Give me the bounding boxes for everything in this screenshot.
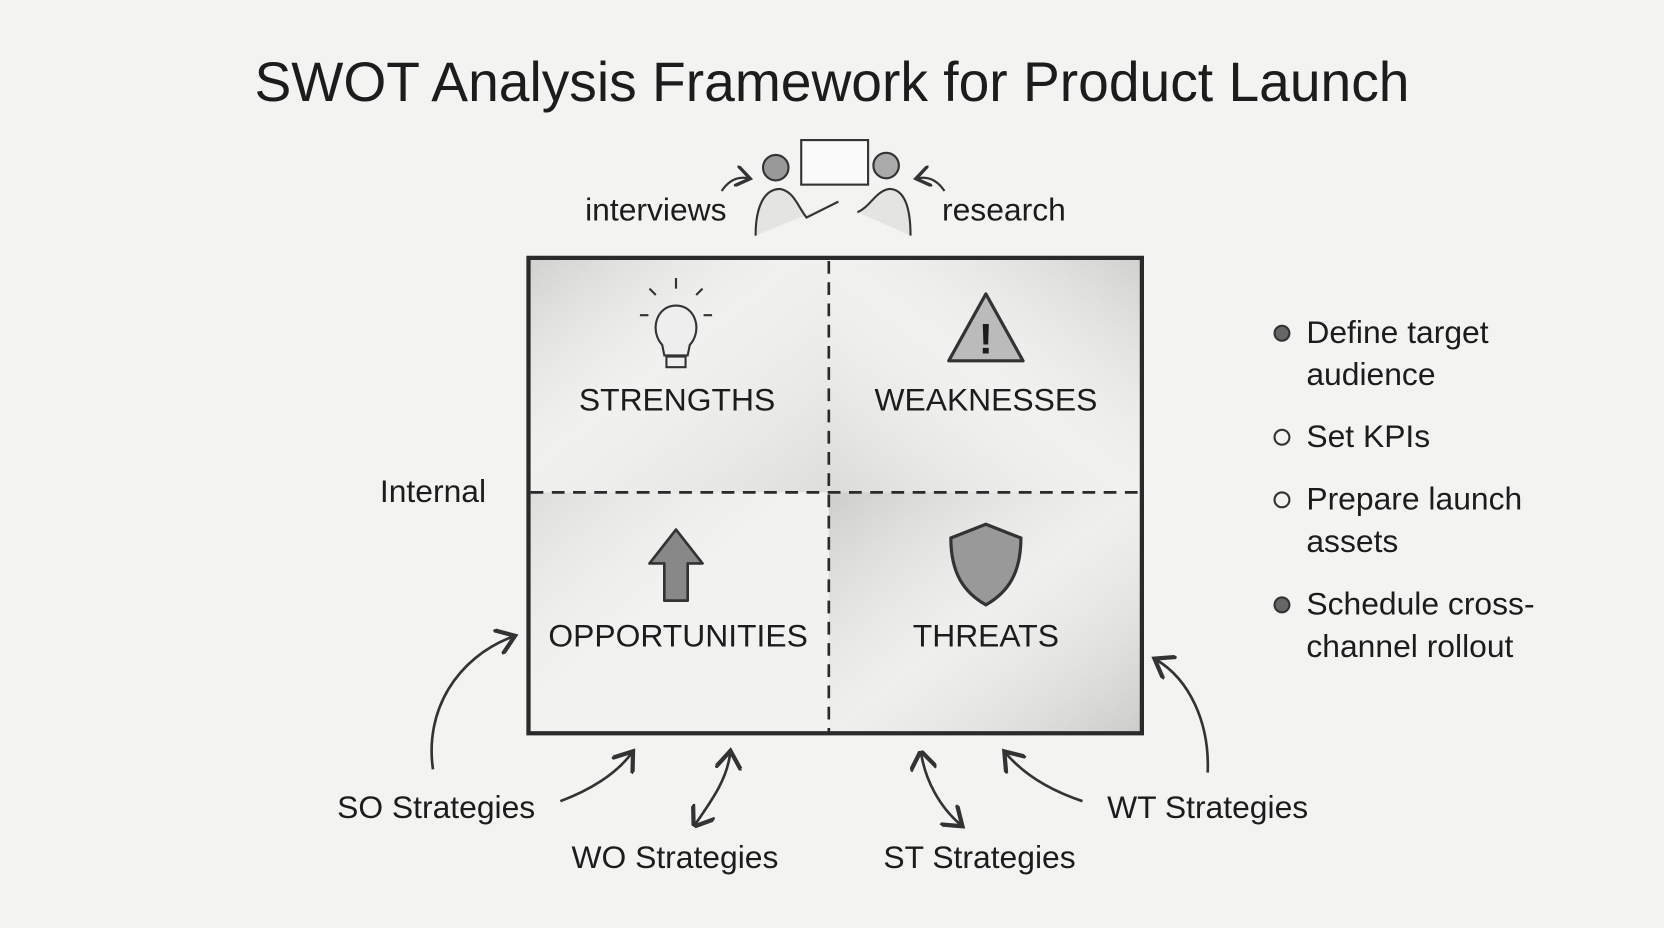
- checklist: Set KPIs: [1306, 418, 1430, 454]
- quadrant: opportunities: OPPORTUNITIES: [548, 617, 808, 653]
- strategy labels: [337, 789, 1308, 875]
- quadrant: strengths: [579, 278, 775, 418]
- people icon: [756, 140, 911, 236]
- label: research: [918, 178, 1066, 228]
- strategy labels: WO Strategies: [571, 839, 778, 875]
- checklist: Prepare launch: [1306, 480, 1522, 516]
- label: interviews: interviews: [585, 192, 727, 228]
- strategy labels: ST Strategies: [883, 839, 1076, 875]
- icon: lightbulb: [640, 278, 712, 367]
- label: internal: Internal: [380, 473, 486, 509]
- checklist: Define target: [1306, 314, 1489, 350]
- quadrant: weaknesses: WEAKNESSES: [874, 382, 1097, 418]
- icon: shield: [951, 524, 1021, 605]
- icon: warning: !: [979, 315, 993, 362]
- icon: up arrow: [649, 530, 703, 601]
- checklist: [1275, 314, 1535, 664]
- SWOT grid: [528, 258, 1142, 733]
- quadrant: weaknesses: [874, 294, 1097, 418]
- quadrant: threats: [913, 524, 1059, 653]
- strategy labels: SO Strategies: [337, 789, 535, 825]
- checklist: assets: [1306, 523, 1398, 559]
- icon: warning: [949, 294, 1023, 362]
- quadrant: opportunities: [548, 530, 808, 653]
- quadrant: strengths: STRENGTHS: [579, 382, 775, 418]
- strategy arrows: [432, 637, 1208, 825]
- checklist: channel rollout: [1306, 628, 1514, 664]
- label: research: research: [942, 192, 1066, 228]
- title: SWOT Analysis Framework for Product Launch: [255, 51, 1409, 113]
- checklist: Schedule cross-: [1306, 585, 1535, 621]
- strategy labels: WT Strategies: [1107, 789, 1308, 825]
- label: interviews: [585, 178, 748, 228]
- checklist: audience: [1306, 356, 1436, 392]
- quadrant: threats: THREATS: [913, 617, 1059, 653]
